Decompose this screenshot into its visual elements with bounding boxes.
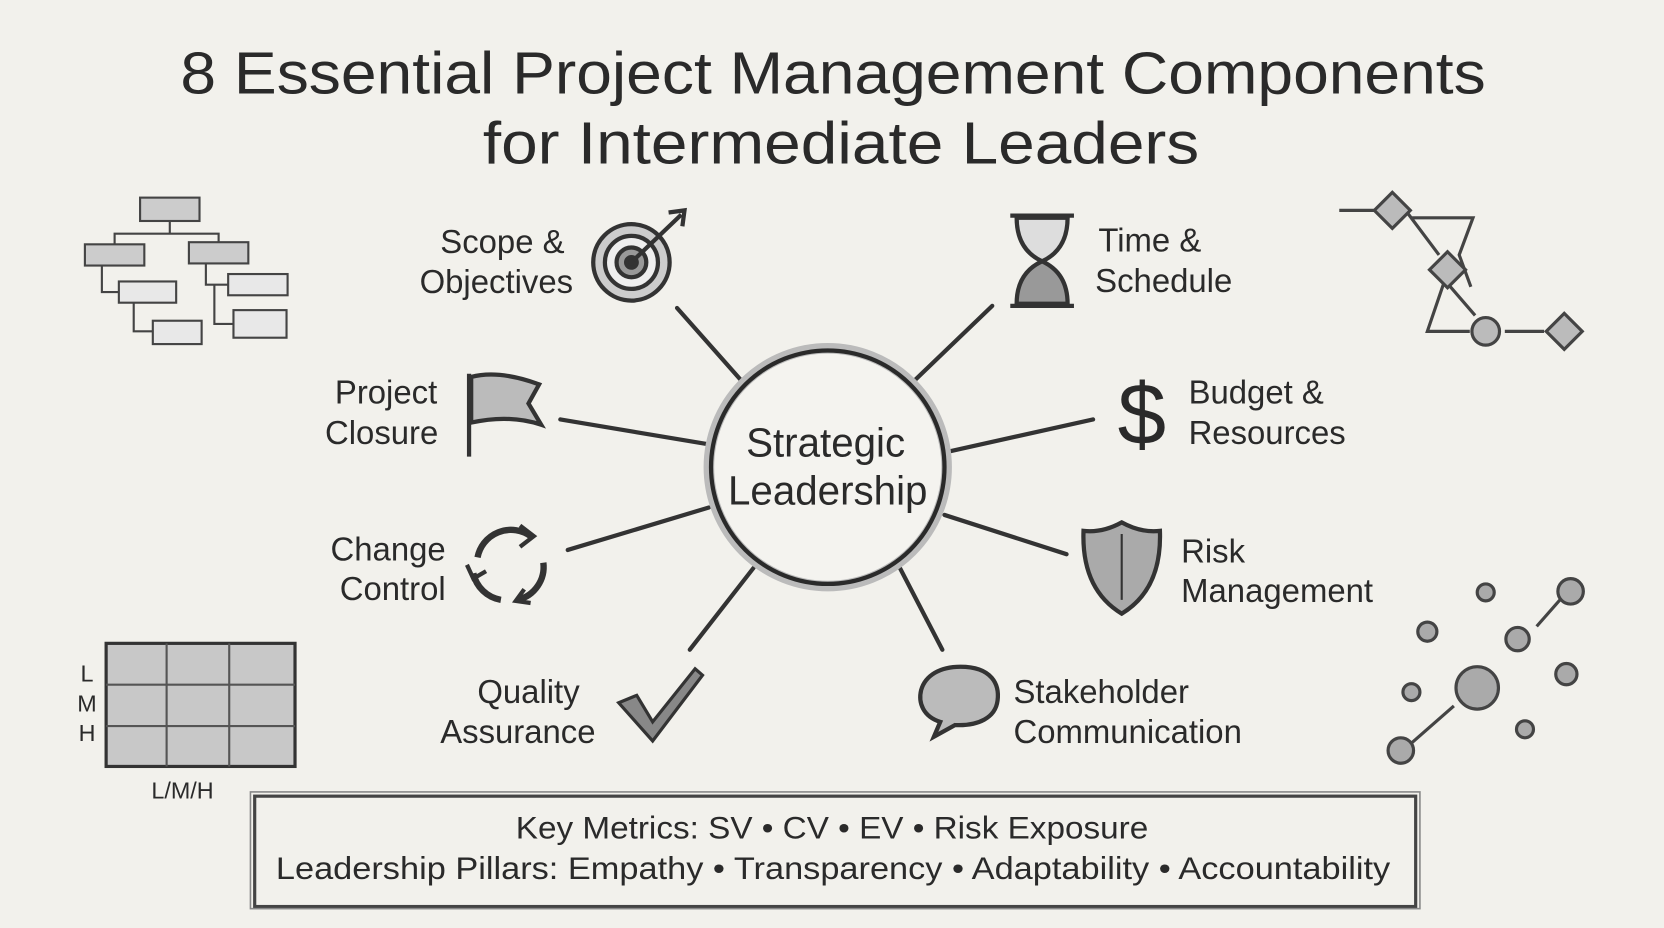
decor: risk matrix [77,643,295,803]
icon: target [593,210,684,301]
label: Stakeholder Communication: Communication [1013,713,1242,750]
center hub: Strategic Leadership: Strategic [746,420,905,466]
label: Stakeholder Communication [1013,673,1242,750]
bottom box: key metrics and pillars [250,792,1420,909]
spokes [560,306,1093,650]
decor: risk matrix: L/M/H [151,777,214,803]
icon: hourglass [1010,216,1074,306]
label: Risk Management: Risk [1181,533,1246,570]
title [180,40,1486,177]
decor: org chart [85,198,288,344]
label: Quality Assurance: Assurance [440,713,596,750]
label: Change Control: Change [331,531,446,568]
label: Time & Schedule [1095,222,1232,299]
icon: shield [1083,522,1160,614]
icon: speech bubble [920,667,998,737]
title: for Intermediate Leaders [483,110,1199,177]
icon: dollar: $ [1118,366,1166,463]
decor: risk matrix: M [77,690,97,716]
label: Scope & Objectives [420,223,573,300]
center hub: Strategic Leadership: Leadership [728,467,927,513]
title: 8 Essential Project Management Components [180,40,1486,107]
decor: risk matrix: L [81,661,94,687]
bottom box: key metrics and pillars: Leadership Pillars: Empathy • Transparency • Adaptability • Accountability [276,850,1390,886]
label: Quality Assurance [440,673,596,750]
label: Budget & Resources: Resources [1189,414,1346,451]
label: Scope & Objectives: Objectives [420,263,573,300]
label: Change Control: Control [340,570,446,607]
label: Scope & Objectives: Scope & [440,223,565,260]
icon: check [619,669,703,741]
icon: cycle arrows [467,526,544,603]
label: Stakeholder Communication: Stakeholder [1013,673,1189,710]
label: Time & Schedule: Time & [1098,222,1201,259]
label: Budget & Resources [1189,374,1346,451]
label: Time & Schedule: Schedule [1095,262,1232,299]
decor: risk matrix: H [79,720,95,746]
label: Quality Assurance: Quality [477,673,580,710]
label: Budget & Resources: Budget & [1189,374,1324,411]
label: Project Closure [325,374,438,451]
center hub: Strategic Leadership [709,348,947,586]
label: Risk Management: Management [1181,572,1373,609]
label: Risk Management [1181,533,1373,609]
decor: process flow [1339,192,1582,349]
label: Project Closure: Closure [325,414,438,451]
bottom box: key metrics and pillars: Key Metrics: SV • CV • EV • Risk Exposure [516,810,1148,846]
decor: network [1388,579,1583,763]
label: Change Control [331,531,446,607]
label: Project Closure: Project [335,374,437,411]
icon: flag [469,374,541,457]
